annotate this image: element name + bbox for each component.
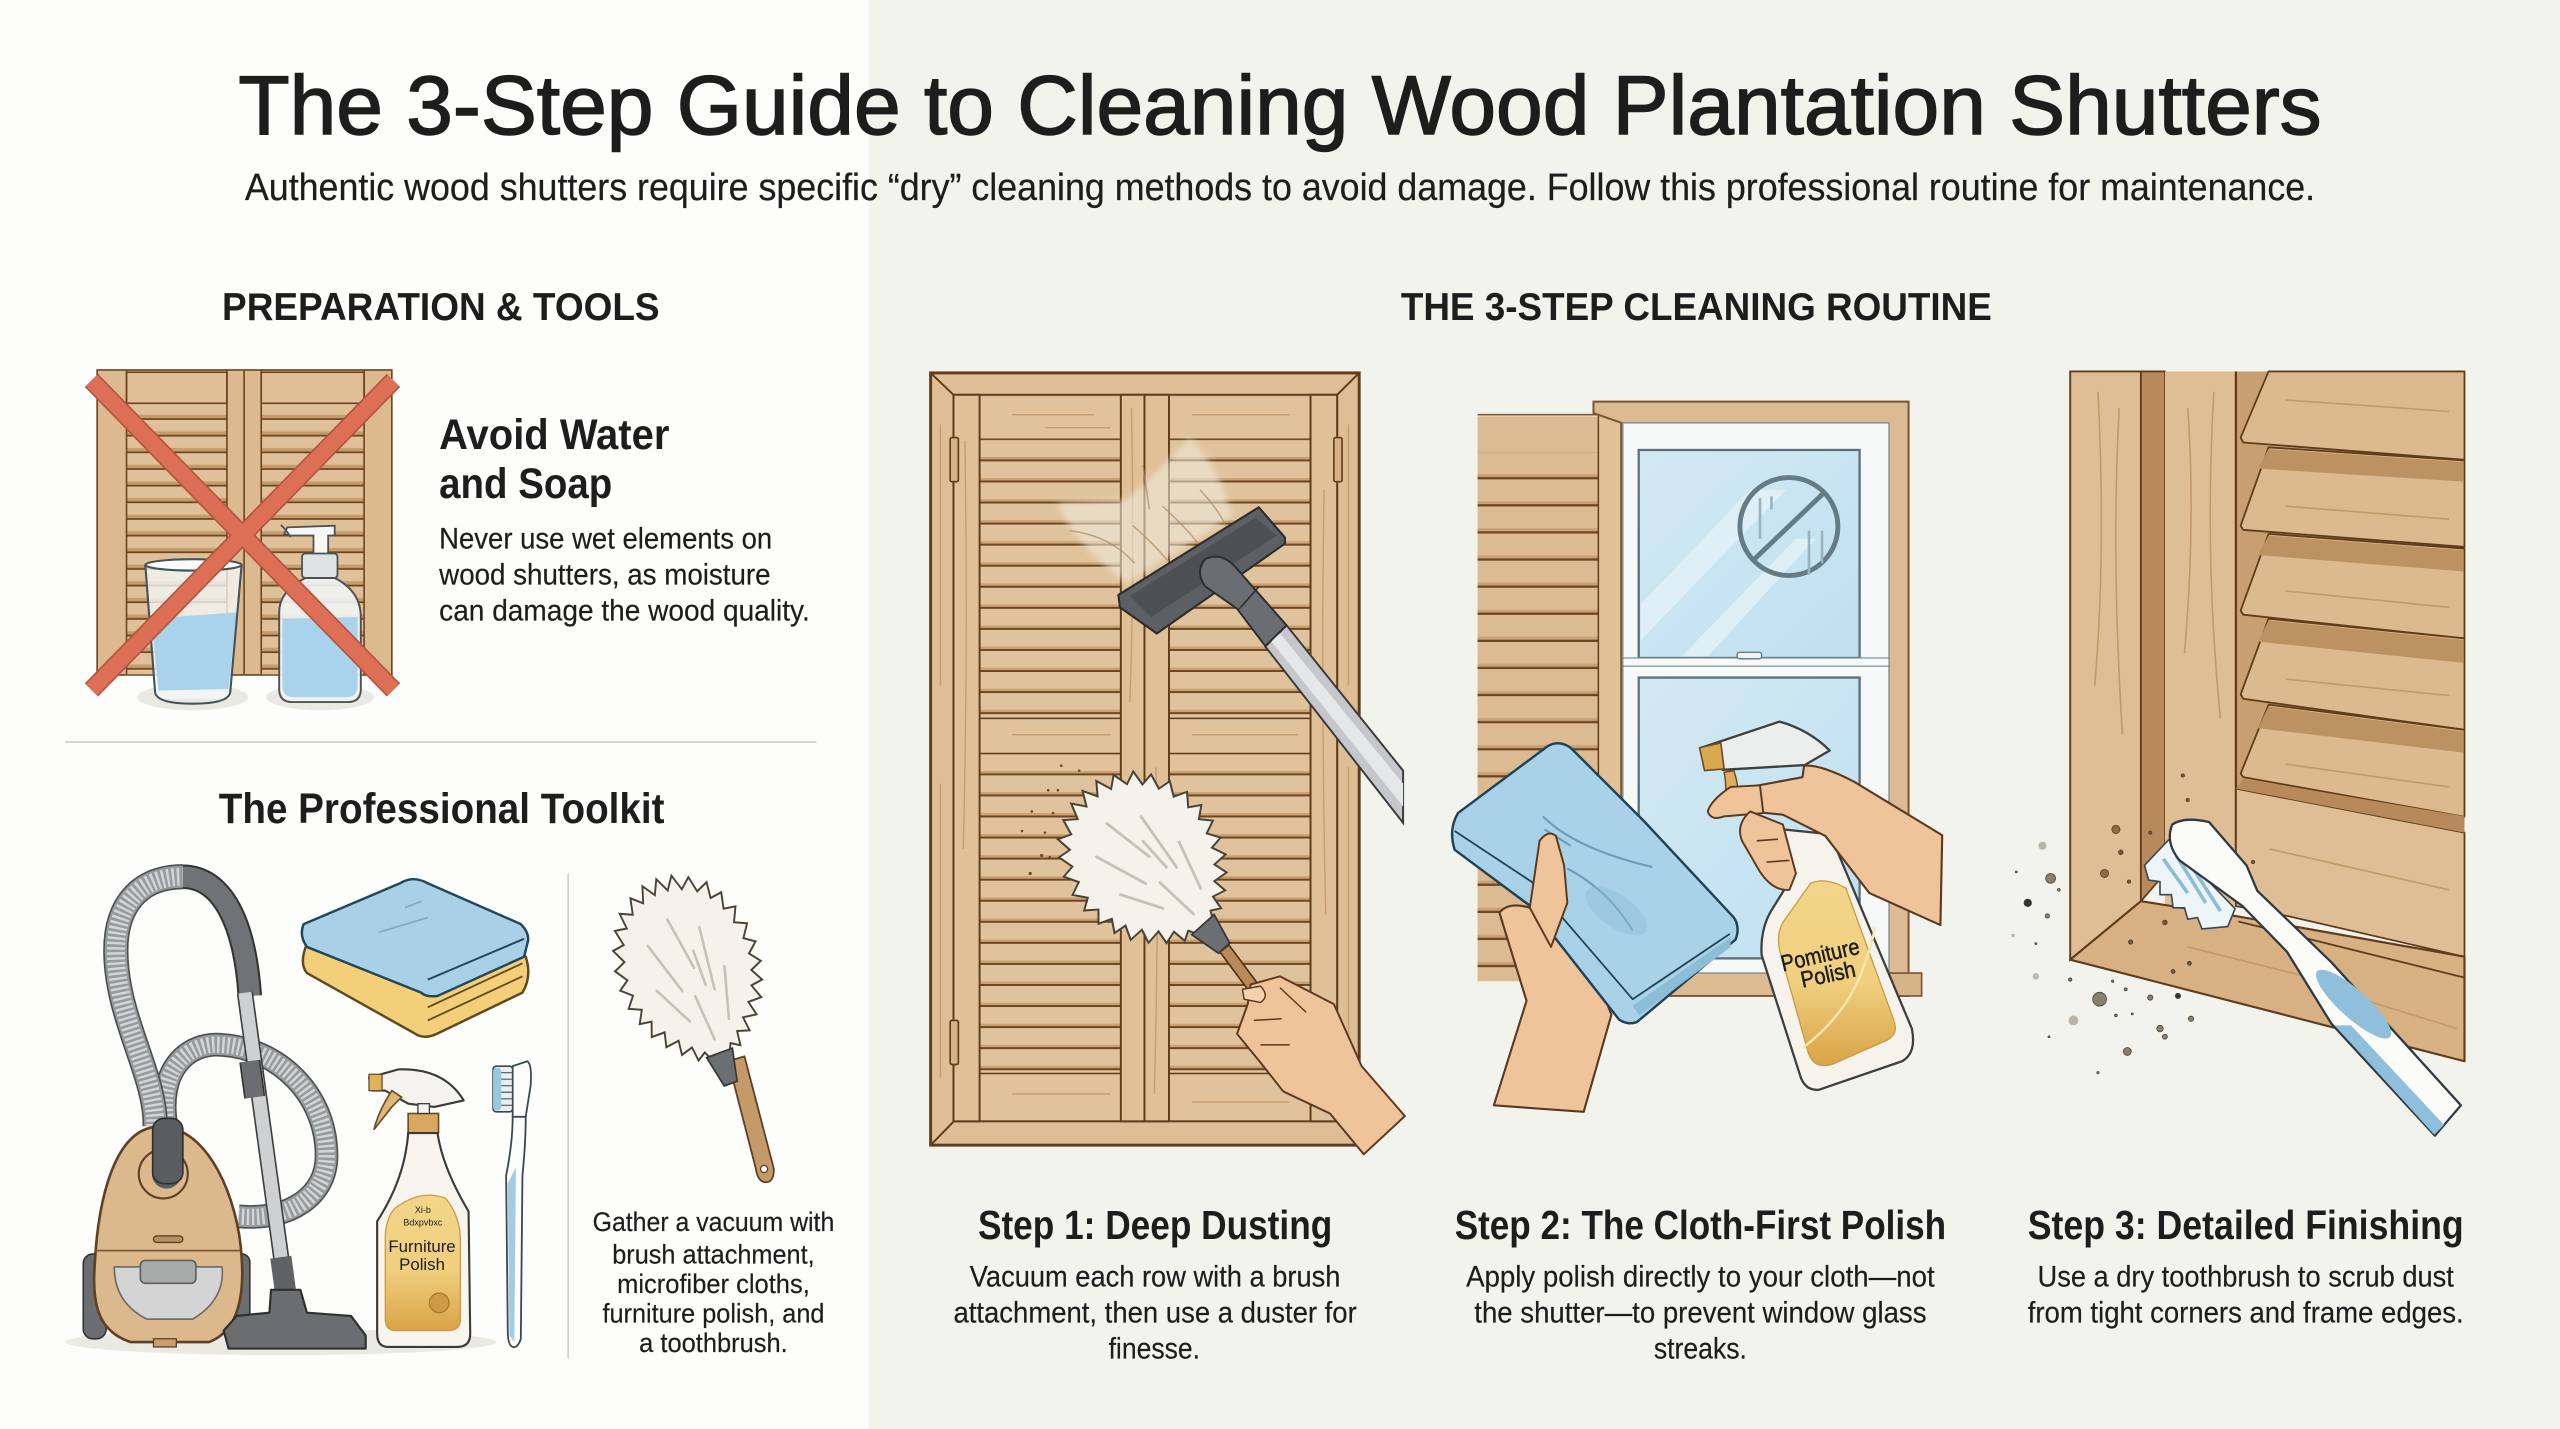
icon: toolkit group — [65, 877, 531, 1355]
step 1 body: finesse. — [1109, 1332, 1200, 1365]
furniture polish spray bottle: Furniture — [388, 1237, 456, 1256]
toothbrush — [2144, 820, 2461, 1136]
dust specks — [1021, 764, 1080, 875]
louvre backing — [2235, 371, 2464, 829]
stiles — [953, 395, 1337, 1121]
step 2 body: Apply polish directly to your cloth—not — [1466, 1261, 1935, 1294]
icon: shutter crossed out with water glass and soap — [91, 370, 393, 710]
heading: avoid water and soap: Avoid Water — [439, 411, 669, 458]
title: The 3-Step Guide to Cleaning Wood Plantation Shutters — [238, 59, 2322, 152]
illustration: step 3 corner with toothbrush — [2011, 371, 2464, 1136]
louvre slats — [2241, 371, 2464, 817]
heading: preparation and tools: PREPARATION & TOOLS — [222, 286, 660, 329]
step 1 body — [953, 1261, 1357, 1365]
illustration: step 2 window with cloth and polish — [1452, 402, 1942, 1112]
dust swoosh — [1058, 438, 1233, 584]
heading: cleaning routine: THE 3-STEP CLEANING ROUTINE — [1401, 286, 1992, 329]
text: toolkit description: brush attachment, — [612, 1240, 815, 1270]
window frame — [1593, 402, 1922, 996]
red cross — [91, 380, 393, 690]
furniture polish spray bottle: Xi-b — [415, 1205, 431, 1215]
vacuum nozzle — [1118, 507, 1287, 646]
icon: feather duster toolkit — [589, 855, 798, 1182]
heading: avoid water and soap — [439, 411, 669, 507]
ground shadow — [65, 1329, 496, 1355]
text: toolkit description — [593, 1207, 834, 1358]
duster — [1024, 738, 1286, 1029]
left louvres — [980, 398, 1120, 1120]
water glass — [145, 559, 242, 704]
furniture polish spray bottle: Polish — [399, 1255, 445, 1274]
shutter — [97, 370, 392, 675]
slat shadows — [2258, 449, 2464, 753]
microfiber cloths — [302, 879, 528, 1037]
vacuum tube — [1265, 625, 1403, 823]
spray bottle: Polish — [1798, 956, 1858, 993]
shutter frame — [931, 373, 1359, 1145]
blue cloth — [1452, 743, 1738, 1023]
step 3 title: Step 3: Detailed Finishing — [2028, 1202, 2464, 1248]
step 3 body — [2028, 1261, 2464, 1329]
furniture polish spray bottle: Bdxpvbxc — [403, 1217, 443, 1227]
left shutter — [1478, 413, 1621, 981]
left thumb — [1530, 834, 1567, 947]
subtitle: Authentic wood shutters require specific “dry” cleaning methods to avoid damage. Follow this professional routine for maintenance. — [245, 166, 2315, 208]
heading: avoid water and soap: and Soap — [439, 460, 612, 507]
step 3 body: Use a dry toothbrush to scrub dust — [2038, 1261, 2454, 1294]
step 2 title: Step 2: The Cloth-First Polish — [1455, 1202, 1946, 1248]
right louvres — [1169, 398, 1310, 1120]
hand holding duster — [1237, 976, 1405, 1154]
illustration: step 1 shutter with vacuum and duster — [931, 373, 1405, 1154]
outer frame — [2070, 371, 2141, 960]
text: toolkit description: microfiber cloths, — [617, 1269, 810, 1299]
vacuum hose rear — [116, 877, 327, 1217]
text: avoid water body — [438, 523, 810, 627]
right hand — [1708, 766, 1942, 925]
text: toolkit description: Gather a vacuum with — [593, 1207, 834, 1237]
toothbrush — [493, 1061, 531, 1347]
step 1 title: Step 1: Deep Dusting — [978, 1202, 1332, 1248]
shadow under items — [137, 684, 248, 710]
floor sill — [2070, 901, 2464, 1061]
wood grain — [2095, 392, 2457, 1029]
wood grain — [940, 408, 1349, 1102]
recess — [2141, 371, 2165, 901]
spray bottle — [1700, 722, 1913, 1090]
spray bottle: Pomiture — [1778, 933, 1862, 976]
background: right panel — [869, 0, 2560, 1429]
bottom rail — [2236, 789, 2464, 957]
text: avoid water body: can damage the wood quality. — [439, 594, 810, 627]
vacuum body — [83, 1118, 250, 1347]
dust and debris — [2011, 774, 2255, 1074]
window panes — [1623, 450, 1889, 958]
stile — [2165, 371, 2235, 910]
text: avoid water body: wood shutters, as moisture — [438, 558, 771, 591]
text: avoid water body: Never use wet elements on — [439, 523, 772, 556]
soap bottle — [279, 525, 361, 702]
step 2 body — [1466, 1261, 1935, 1365]
no-streak sign — [1740, 478, 1838, 576]
left hand palm — [1494, 903, 1611, 1112]
step 1 body: Vacuum each row with a brush — [970, 1261, 1340, 1294]
background: left panel — [0, 0, 869, 1429]
step 2 body: the shutter—to prevent window glass — [1474, 1296, 1927, 1329]
hinges — [950, 438, 1342, 1064]
text: toolkit description: furniture polish, and — [602, 1298, 824, 1328]
heading: the professional toolkit: The Professional Toolkit — [219, 785, 664, 832]
step 1 body: attachment, then use a duster for — [953, 1296, 1357, 1329]
step 2 body: streaks. — [1654, 1332, 1747, 1365]
furniture polish spray bottle — [369, 1069, 470, 1347]
text: toolkit description: a toothbrush. — [639, 1328, 788, 1358]
step 3 body: from tight corners and frame edges. — [2028, 1296, 2464, 1329]
vacuum wand and floor head — [224, 993, 366, 1349]
